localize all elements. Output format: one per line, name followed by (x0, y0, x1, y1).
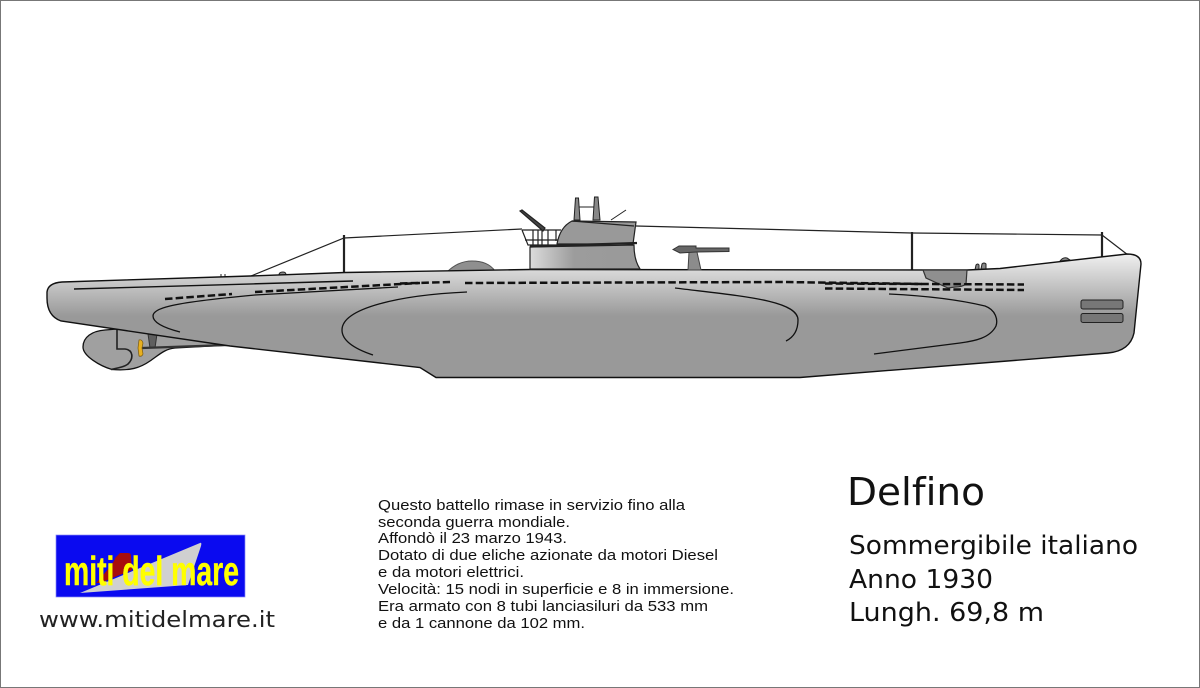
description text: Velocità: 15 nodi in superficie e 8 in immersione. (378, 581, 734, 598)
description text: e da 1 cannone da 102 mm. (378, 615, 585, 632)
description text: Era armato con 8 tubi lanciasiluri da 533 mm (378, 598, 708, 615)
periscopes (574, 197, 600, 220)
description text: Questo battello rimase in servizio fino alla (378, 497, 686, 514)
submarine specs: Lungh. 69,8 m (849, 598, 1044, 628)
torpedo tubes (1081, 300, 1123, 322)
railing (522, 230, 561, 245)
bow plane (923, 270, 967, 288)
tower base (530, 245, 640, 269)
rudder and stern fin (83, 327, 230, 370)
submarine specs: Anno 1930 (849, 565, 993, 595)
bridge (557, 221, 636, 244)
description text: e da motori elettrici. (378, 564, 524, 581)
title: Delfino (847, 470, 985, 514)
description text: Dotato di due eliche azionate da motori Diesel (378, 547, 718, 564)
conning tower (520, 197, 640, 269)
logo: miti del mare (56, 535, 245, 597)
anti-aircraft gun (520, 210, 545, 231)
dashed deck lines (165, 282, 1024, 299)
deck gun (673, 246, 729, 270)
description text (378, 497, 734, 632)
hull (47, 254, 1141, 378)
submarine specs: Sommergibile italiano (849, 531, 1138, 561)
deck fittings: vents and bollards (279, 258, 1070, 275)
description text: seconda guerra mondiale. (378, 514, 570, 531)
submarine side view (47, 197, 1141, 378)
logo: miti del mare: miti del mare (64, 548, 239, 594)
rigging wires and masts (221, 226, 1128, 277)
aft dome (447, 261, 495, 272)
website url: www.mitidelmare.it (39, 608, 275, 633)
submarine specs (849, 531, 1138, 628)
hull lines (74, 281, 997, 355)
propeller (138, 340, 143, 356)
description text: Affondò il 23 marzo 1943. (378, 530, 567, 547)
